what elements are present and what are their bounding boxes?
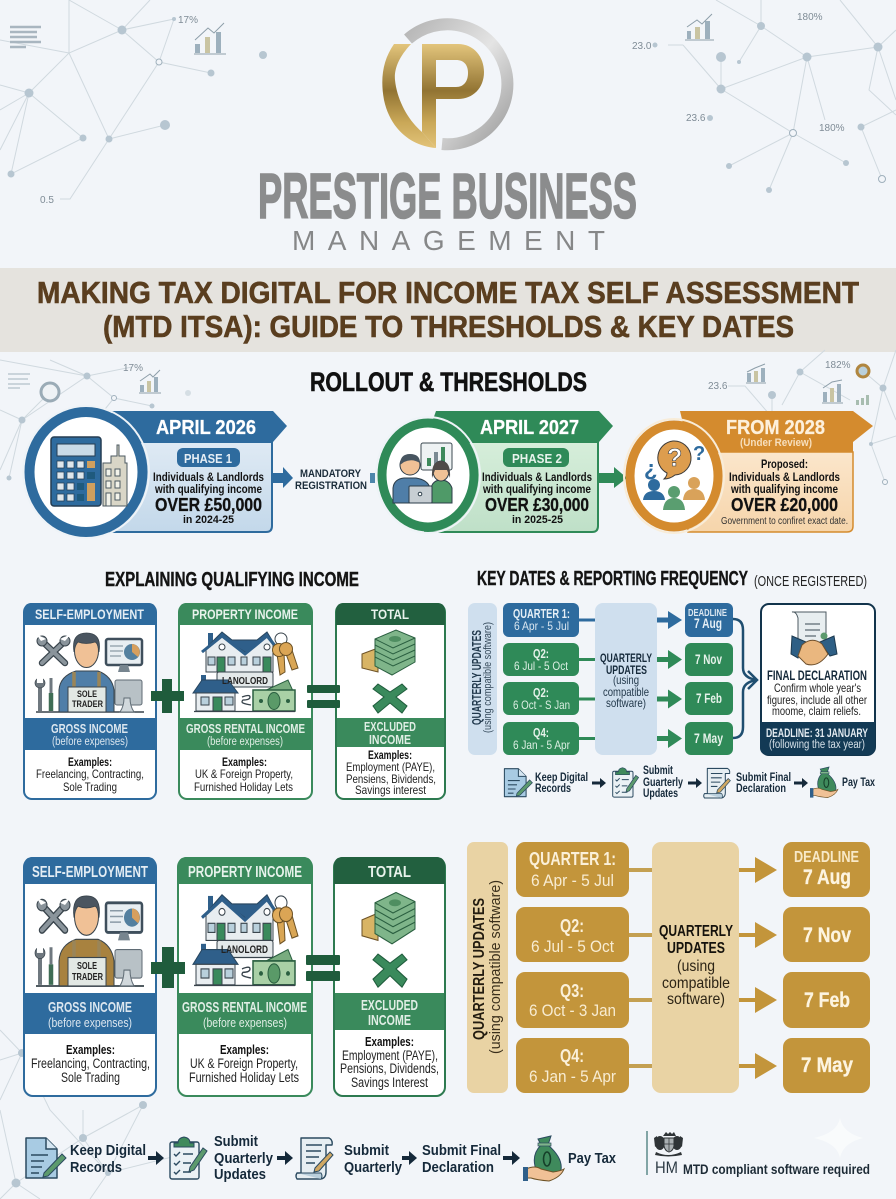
process row (upper): Guarterly xyxy=(643,775,683,789)
chart: lower quarterly flow: QUARTERLY xyxy=(659,923,733,940)
process row (lower): Submit xyxy=(344,1142,389,1159)
chart: lower quarterly flow: compatible xyxy=(662,975,730,992)
panel: property income (lower): Examples: xyxy=(220,1042,269,1057)
icon: sole trader: SOLE xyxy=(77,961,97,972)
panel: final declaration xyxy=(760,604,875,755)
panel: phase 2: in 2025-25 xyxy=(512,514,563,526)
panel: phase 2 xyxy=(376,411,613,533)
panel: phase 1: Individuals & Landlords xyxy=(153,470,264,484)
panel: total excluded income (upper) xyxy=(336,603,445,799)
panel: vertical quarterly updates label (lower): (using compatible software) xyxy=(487,880,504,1054)
panel: total excluded income (upper): EXCLUDED xyxy=(364,719,416,734)
decorative network top right: 23.6 xyxy=(686,113,706,124)
icon: phase 2 circle with people xyxy=(376,417,480,533)
panel: phase 2: OVER £30,000 xyxy=(485,495,589,515)
icon: plus (upper) xyxy=(151,679,184,713)
icon: cash and cross xyxy=(362,630,415,713)
decorative network top right xyxy=(632,0,896,193)
icon: scroll xyxy=(296,1138,333,1179)
panel: from 2028: (Under Review) xyxy=(740,437,812,449)
panel: final declaration: (following the tax year) xyxy=(769,739,865,751)
deadline boxes: 7 Feb xyxy=(696,691,722,706)
process row (lower): Submit Final xyxy=(422,1142,501,1159)
q3 box: 6 Oct - S Jan xyxy=(513,698,570,712)
panel: phase 1: in 2024-25 xyxy=(183,514,234,526)
q1 box: 6 Apr - 5 Jul xyxy=(514,619,569,633)
process row (upper): Pay Tax xyxy=(842,775,875,789)
icon: sole trader xyxy=(35,896,144,986)
icon: scroll xyxy=(704,768,730,798)
panel: vertical quarterly updates label (upper): (using compatible software) xyxy=(482,622,494,733)
panel: from 2028 xyxy=(624,411,873,533)
decorative network top right: 180% xyxy=(819,123,845,134)
panel: phase 2: PHASE 2 xyxy=(512,451,562,466)
panel: phase 2: Individuals & Landlords xyxy=(482,470,592,484)
panel: self-employment (lower): SELF-EMPLOYMENT xyxy=(32,864,148,881)
decorative network middle: 182% xyxy=(825,360,851,371)
decorative network middle: 17% xyxy=(123,363,143,374)
arrow: phase 1 to registration xyxy=(272,467,293,488)
panel: property income (lower): UK & Foreign Property, xyxy=(190,1056,298,1071)
deadline boxes: 7 Feb xyxy=(804,989,850,1012)
q3 box xyxy=(503,682,579,715)
decorative network middle xyxy=(0,350,896,484)
label: mandatory registration xyxy=(295,468,375,492)
process row (lower): Declaration xyxy=(422,1159,494,1176)
process row (upper): Declaration xyxy=(736,781,786,795)
chart: upper quarterly flow xyxy=(503,603,733,755)
panel: from 2028: Proposed: xyxy=(761,457,808,471)
decorative network top right: 23.0 xyxy=(632,41,652,52)
arrows to deadlines xyxy=(657,611,682,748)
logo mark xyxy=(382,24,507,148)
panel: phase 1: with qualifying income xyxy=(154,482,262,496)
deadline boxes: 7 May xyxy=(694,731,723,746)
panel: total excluded income (lower): EXCLUDED xyxy=(361,997,418,1014)
q3 box: Q3: xyxy=(560,981,584,1001)
compliance note with crest xyxy=(647,1131,870,1177)
icon: phase 1 circle with calculator xyxy=(23,406,149,538)
panel: total excluded income (upper): Examples: xyxy=(368,750,412,762)
icon: landlord houses xyxy=(193,632,298,712)
compliance note with crest: HM xyxy=(655,1158,678,1177)
label: mandatory registration: REGISTRATION xyxy=(295,480,367,492)
panel: property income (upper): PROPERTY INCOME xyxy=(192,606,298,622)
chart: lower quarterly flow: (using xyxy=(677,958,715,975)
panel: final declaration: moome, claim reliefs. xyxy=(772,704,861,718)
process row (upper): Updates xyxy=(643,786,678,800)
icon: equals (lower) xyxy=(306,955,340,981)
decorative network bottom left xyxy=(0,1030,200,1199)
panel: total excluded income (upper): Pensiens, Bividends, xyxy=(346,772,436,786)
arrow: deadlines to final declaration xyxy=(733,619,757,738)
panel: vertical quarterly updates label (upper) xyxy=(468,603,497,755)
decorative network middle: 23.6 xyxy=(708,381,728,392)
panel: self-employment (lower): Examples: xyxy=(66,1042,115,1057)
icon: sole trader: TRADER xyxy=(72,699,103,709)
panel: phase 1: OVER £50,000 xyxy=(155,495,262,515)
process row (lower) xyxy=(26,1133,617,1183)
panel: total excluded income (lower): Pensions, Dividends, xyxy=(340,1061,439,1076)
icon: sole trader xyxy=(35,633,144,712)
panel: self-employment (upper): SELF-EMPLOYMENT xyxy=(35,606,144,622)
panel: self-employment (upper): Examples: xyxy=(68,757,112,769)
arrow: phase 2 to phase 3 xyxy=(598,467,627,488)
icon: sole trader: SOLE xyxy=(77,689,97,699)
company name: MANAGEMENT xyxy=(292,225,605,256)
panel: phase 1: APRIL 2026 xyxy=(156,417,256,439)
panel: property income (lower): GROSS RENTAL INCOME xyxy=(182,999,307,1016)
chart: upper quarterly flow: QUARTERLY xyxy=(600,651,652,665)
heading: explaining qualifying income: EXPLAINING QUALIFYING INCOME xyxy=(105,569,359,591)
company name xyxy=(258,160,637,256)
panel: property income (lower): PROPERTY INCOME xyxy=(188,864,302,881)
panel: final declaration: figures, include all other xyxy=(767,693,867,707)
process row (lower): Updates xyxy=(214,1166,266,1183)
icon: checklist xyxy=(613,768,639,797)
panel: self-employment (lower): (before expenses) xyxy=(48,1015,132,1030)
panel: final declaration: Confirm whole year's xyxy=(774,681,861,695)
panel: total excluded income (upper): Savings interest xyxy=(355,783,427,797)
q2 box: Q2: xyxy=(560,916,584,936)
decorative network top left: 0.5 xyxy=(40,195,54,206)
q2 box xyxy=(503,643,579,676)
panel: self-employment (upper) xyxy=(24,603,156,799)
icon: from 2028 circle with question marks: ? xyxy=(667,444,682,472)
icon: contract handshake xyxy=(791,612,837,665)
panel: total excluded income (lower): TOTAL xyxy=(368,864,411,881)
panel: total excluded income (lower) xyxy=(334,857,445,1096)
process row (lower): Keep Digital xyxy=(70,1142,146,1159)
panel: total excluded income (lower): Examples: xyxy=(365,1034,414,1049)
icon: digital records xyxy=(504,769,532,797)
panel: total excluded income (upper): INCOME xyxy=(369,732,411,747)
q1 box: QUARTER 1: xyxy=(529,849,616,869)
title band: (MTD ITSA): GUIDE TO THRESHOLDS & KEY DATES xyxy=(103,309,794,344)
q1 box xyxy=(516,842,629,897)
deadline boxes: 7 Aug xyxy=(803,866,851,889)
panel: property income (upper): Examples: xyxy=(222,757,267,769)
q4 box: Q4: xyxy=(560,1046,584,1066)
panel: phase 1: PHASE 1 xyxy=(184,451,232,466)
deadline boxes: DEADLINE xyxy=(688,608,727,619)
title band xyxy=(0,268,896,352)
icon: from 2028 circle with question marks xyxy=(624,419,724,533)
panel: property income (upper) xyxy=(179,603,312,799)
panel: from 2028: with qualifying income xyxy=(730,482,838,496)
icon: sparkle xyxy=(814,1118,863,1158)
chart: upper quarterly flow: (using xyxy=(613,673,639,687)
panel: self-employment (upper): Sole Trading xyxy=(63,780,117,794)
panel: from 2028: Government to confiret exact date. xyxy=(721,516,848,527)
icon: from 2028 circle with question marks: ¿ xyxy=(644,456,657,481)
panel: total excluded income (lower): Employment (PAYE), xyxy=(342,1048,438,1063)
icon: from 2028 circle with question marks: ? xyxy=(693,443,705,465)
panel: self-employment (upper): GROSS INCOME xyxy=(51,721,128,736)
panel: property income (upper): Furnished Holiday Lets xyxy=(194,780,293,794)
icon: checklist xyxy=(170,1137,207,1179)
panel: total excluded income (lower): INCOME xyxy=(368,1012,411,1029)
deadline boxes xyxy=(685,603,733,755)
q3 box: Q2: xyxy=(533,685,549,700)
process row (lower): Quarterly xyxy=(344,1159,403,1176)
panel: phase 2: with qualifying income xyxy=(482,482,591,496)
heading: key dates: KEY DATES & REPORTING FREQUENCY xyxy=(477,568,748,590)
chart: upper quarterly flow: compatible xyxy=(603,685,649,699)
panel: vertical quarterly updates label (lower) xyxy=(467,842,508,1093)
q2 box: 6 Jul - 5 Oct xyxy=(531,937,614,956)
q4 box xyxy=(503,722,579,755)
q2 box: Q2: xyxy=(533,646,549,661)
q4 box: Q4: xyxy=(533,725,549,740)
deadline boxes: 7 Nov xyxy=(695,652,722,667)
icon: landlord houses xyxy=(193,895,298,985)
panel: property income (upper): (before expenses) xyxy=(207,736,283,748)
arrows to deadlines xyxy=(739,857,777,1079)
heading: rollout and thresholds: ROLLOUT & THRESHOLDS xyxy=(310,367,587,397)
icon: money bag xyxy=(810,767,838,798)
icon: digital records xyxy=(26,1138,66,1178)
q2 box: 6 Jul - 5 Oct xyxy=(514,659,569,673)
process row (upper): Submit xyxy=(643,763,673,777)
q1 box: 6 Apr - 5 Jul xyxy=(531,871,614,890)
q4 box xyxy=(516,1038,629,1093)
deadline boxes: DEADLINE xyxy=(794,849,859,866)
process row (upper): Keep Digital xyxy=(535,770,588,784)
panel: phase 1 xyxy=(23,406,287,538)
panel: property income (lower): (before expenses) xyxy=(203,1015,287,1030)
panel: self-employment (upper): (before expenses) xyxy=(52,736,128,748)
panel: from 2028: OVER £20,000 xyxy=(731,495,838,515)
decorative network top right: 180% xyxy=(797,12,823,23)
q3 box xyxy=(516,972,629,1028)
deadline boxes: 7 Nov xyxy=(803,924,851,947)
process row (upper): Records xyxy=(535,781,571,795)
panel: self-employment (lower): GROSS INCOME xyxy=(48,999,132,1016)
panel: property income (upper): UK & Foreign Property, xyxy=(195,767,293,781)
q1 box: QUARTER 1: xyxy=(513,606,570,621)
icon: plus (lower) xyxy=(151,947,185,988)
panel: from 2028: FROM 2028 xyxy=(726,417,825,439)
panel: total excluded income (upper): Employment (PAYE), xyxy=(346,760,435,774)
deadline boxes: 7 Aug xyxy=(694,616,722,631)
chart: lower quarterly flow xyxy=(516,842,870,1093)
q4 box: 6 Jan - 5 Apr xyxy=(513,738,570,752)
chart: lower quarterly flow: software) xyxy=(667,991,725,1008)
icon: landlord houses: LANOLORD xyxy=(221,944,268,956)
q4 box: 6 Jan - 5 Apr xyxy=(529,1067,616,1086)
decorative network top left xyxy=(0,0,267,206)
icon: sole trader: TRADER xyxy=(72,972,104,983)
icon: money bag xyxy=(523,1136,564,1181)
process row (upper) xyxy=(504,763,875,800)
panel: self-employment (lower): Freelancing, Contracting, xyxy=(31,1056,150,1071)
process row (lower): Pay Tax xyxy=(568,1150,617,1167)
chart: lower quarterly flow: UPDATES xyxy=(667,940,725,957)
panel: phase 2: APRIL 2027 xyxy=(480,417,579,439)
deadline boxes xyxy=(783,842,870,1093)
q1 box xyxy=(503,603,579,637)
panel: property income (lower) xyxy=(178,857,312,1096)
panel: from 2028: Individuals & Landlords xyxy=(729,470,840,484)
chart: upper quarterly flow: software) xyxy=(606,696,646,710)
decorative network top left: 17% xyxy=(178,15,198,26)
panel: total excluded income (lower): Savings Interest xyxy=(351,1075,428,1090)
deadline boxes: 7 May xyxy=(801,1054,853,1077)
icon: landlord houses: LANOLORD xyxy=(222,676,268,687)
panel: vertical quarterly updates label (lower): QUARTERLY UPDATES xyxy=(471,898,488,1040)
panel: total excluded income (upper): TOTAL xyxy=(371,606,409,622)
icon: cash and cross xyxy=(362,893,415,987)
panel: vertical quarterly updates label (upper): QUARTERLY UPDATES xyxy=(470,630,484,725)
q3 box: 6 Oct - 3 Jan xyxy=(529,1001,616,1020)
panel: self-employment (lower): Sole Trading xyxy=(61,1070,120,1085)
process row (lower): Submit xyxy=(214,1133,258,1150)
panel: property income (upper): GROSS RENTAL INCOME xyxy=(186,721,305,736)
process row (lower): Quarterly xyxy=(214,1150,274,1167)
panel: property income (lower): Furnished Holiday Lets xyxy=(189,1070,299,1085)
process row (lower): Records xyxy=(70,1159,122,1176)
label: mandatory registration: MANDATORY xyxy=(300,468,362,480)
panel: self-employment (lower) xyxy=(24,857,156,1096)
chart: upper quarterly flow: UPDATES xyxy=(606,663,647,677)
panel: self-employment (upper): Freelancing, Contracting, xyxy=(36,767,144,781)
process row (upper): Submit Final xyxy=(736,770,791,784)
icon: equals (upper) xyxy=(307,685,340,708)
q2 box xyxy=(516,907,629,962)
